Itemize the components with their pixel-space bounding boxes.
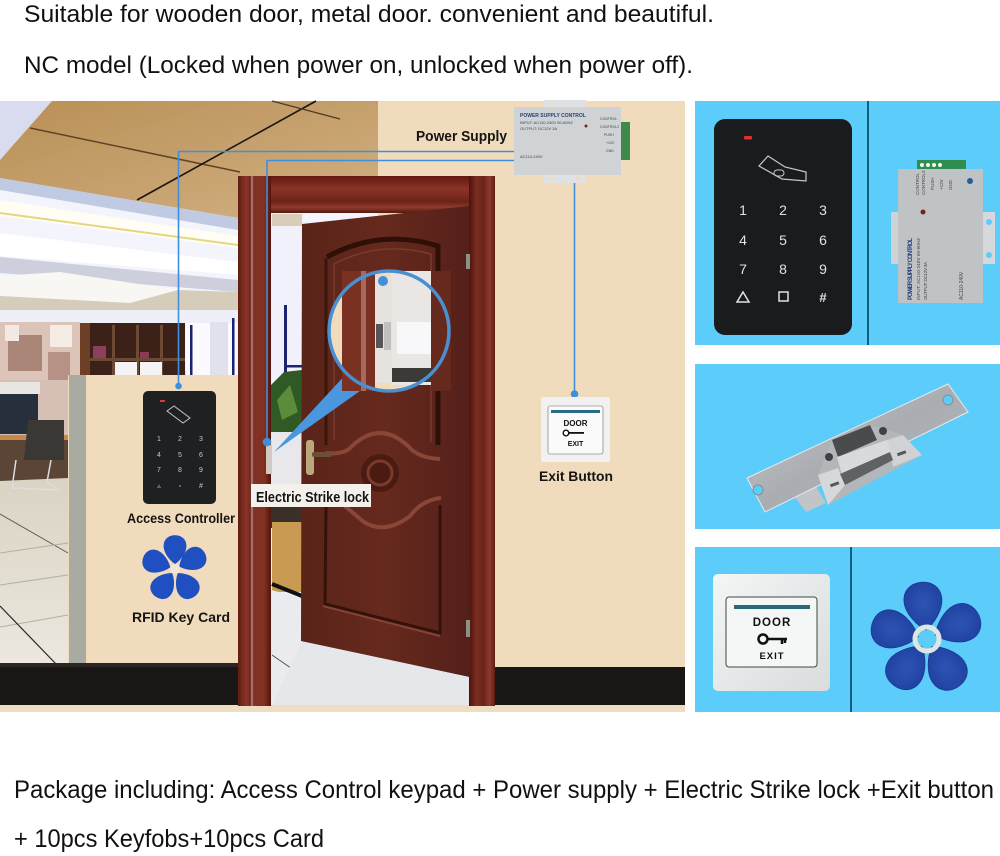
access controller keypad: 4 bbox=[157, 452, 161, 459]
keypad photo: 9 bbox=[819, 261, 827, 277]
key fobs photo bbox=[867, 580, 987, 697]
power supply unit: INPUT: AC110-240V 50-60HZ bbox=[520, 120, 573, 125]
medallion carving bbox=[326, 433, 440, 459]
access controller keypad: 9 bbox=[199, 467, 203, 474]
access controller keypad: # bbox=[199, 483, 203, 490]
hinges bbox=[466, 254, 470, 269]
power supply photo: GND bbox=[948, 179, 953, 190]
lower panel carving bbox=[325, 505, 440, 633]
exit button photo: DOOR bbox=[753, 617, 791, 629]
wire: exit button to power supply bbox=[572, 180, 578, 397]
panel: electric strike lock photo bbox=[695, 364, 1000, 529]
power supply unit: CONTROL bbox=[600, 117, 617, 121]
wire: strike lock to power supply bbox=[264, 160, 514, 446]
panel: exit button and key fob photos bbox=[695, 547, 1000, 712]
power supply unit: POWER SUPPLY CONTROL bbox=[520, 113, 586, 119]
door frame bbox=[238, 176, 495, 706]
keypad photo: 4 bbox=[739, 232, 747, 248]
text: package contents line two: + 10pcs Keyfobs+10pcs Card bbox=[14, 825, 324, 853]
label: exit button: Exit Button bbox=[539, 468, 613, 484]
keypad photo: 6 bbox=[819, 232, 827, 248]
callout: magnified strike lock bbox=[274, 271, 451, 452]
power supply photo: PUSH bbox=[930, 177, 935, 190]
door opening view bbox=[270, 212, 330, 705]
label: power supply: Power Supply bbox=[416, 129, 507, 145]
mural bbox=[0, 322, 80, 400]
heading line: NC model: NC model (Locked when power on, unlocked when power off). bbox=[24, 52, 693, 79]
label: electric strike lock bbox=[251, 484, 371, 507]
label: access controller: Access Controller bbox=[127, 510, 235, 526]
panel: keypad and power supply photos bbox=[695, 101, 1000, 345]
power supply photo: OUTPUT: DC12V 3A bbox=[923, 262, 928, 300]
lobby furniture bbox=[0, 380, 68, 440]
heading line: door suitability: Suitable for wooden door, metal door. convenient and beautiful. bbox=[24, 1, 714, 28]
power supply photo: +12V bbox=[939, 179, 944, 190]
access controller keypad: ▫ bbox=[179, 483, 181, 490]
power supply unit: CONTROL2 bbox=[600, 125, 619, 129]
keypad photo: 5 bbox=[779, 232, 787, 248]
power supply photo: CONTROL2 bbox=[921, 170, 926, 195]
access controller keypad: ▵ bbox=[157, 483, 161, 490]
power supply unit: OUTPUT: DC12V 3A bbox=[520, 126, 557, 131]
exit button: EXIT bbox=[568, 441, 584, 448]
magnifier pin bbox=[378, 276, 388, 286]
keypad photo bbox=[714, 119, 852, 335]
keypad photo: 3 bbox=[819, 202, 827, 218]
access controller keypad: 1 bbox=[157, 436, 161, 443]
door handle bbox=[306, 440, 332, 475]
power supply unit: PUSH bbox=[604, 133, 614, 137]
panel: installation scene bbox=[0, 100, 685, 712]
wall shelves bbox=[80, 323, 185, 383]
small strike lock on frame bbox=[266, 445, 272, 474]
room background bbox=[0, 101, 685, 712]
power supply unit bbox=[514, 100, 630, 183]
label: electric strike lock: Electric Strike lock bbox=[256, 490, 370, 506]
keypad photo: 2 bbox=[779, 202, 787, 218]
baseboard bbox=[0, 667, 685, 705]
access controller keypad: 6 bbox=[199, 452, 203, 459]
upper panel carving bbox=[327, 239, 438, 445]
keypad photo: # bbox=[819, 290, 827, 305]
power supply photo: CONTROL bbox=[915, 173, 920, 195]
strike lock bbox=[747, 384, 968, 512]
access controller keypad: 5 bbox=[178, 452, 182, 459]
power supply photo: POWER SUPPLY CONTROL bbox=[908, 238, 914, 300]
front desk wall bbox=[68, 375, 238, 663]
power supply photo bbox=[891, 160, 995, 303]
exit button photo bbox=[713, 574, 830, 691]
floor in front of door bbox=[272, 641, 470, 705]
access controller keypad: 2 bbox=[178, 436, 182, 443]
access controller keypad bbox=[143, 391, 216, 504]
power supply unit: GND bbox=[606, 149, 614, 153]
ceiling light panel bbox=[0, 272, 178, 303]
power supply unit: AC110-240V bbox=[520, 154, 543, 159]
door leaf bbox=[301, 206, 470, 677]
power supply photo: AC110-240V bbox=[959, 271, 965, 300]
label: RFID key card: RFID Key Card bbox=[132, 609, 230, 625]
access controller keypad: 7 bbox=[157, 467, 161, 474]
exit button: DOOR bbox=[564, 419, 588, 428]
power supply photo: INPUT: AC110-240V 50-60HZ bbox=[916, 238, 921, 300]
wire: access controller to power supply bbox=[176, 152, 514, 388]
access controller keypad: 3 bbox=[199, 436, 203, 443]
RFID key fobs bbox=[139, 535, 210, 603]
keypad photo: 1 bbox=[739, 202, 747, 218]
exit button photo: EXIT bbox=[759, 651, 785, 662]
access controller keypad: 8 bbox=[178, 467, 182, 474]
exit button bbox=[541, 397, 610, 462]
keypad photo: 8 bbox=[779, 261, 787, 277]
keypad photo: 7 bbox=[739, 261, 747, 277]
power supply unit: +12V bbox=[606, 141, 615, 145]
